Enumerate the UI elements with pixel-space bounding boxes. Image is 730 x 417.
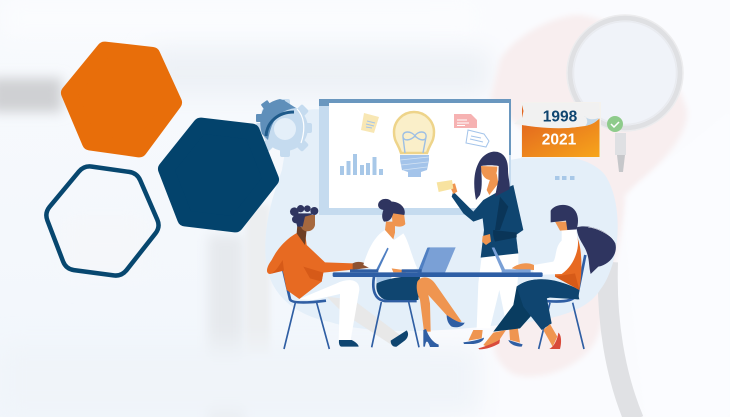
blazer: [452, 185, 523, 258]
stethoscope chest piece: [567, 15, 683, 172]
vest: [555, 236, 581, 290]
hexagon: orange: [69, 50, 174, 149]
icon: light bulb: [394, 112, 434, 177]
hand: card arm: [449, 183, 457, 194]
card: [437, 180, 453, 192]
person: seated woman in orange vest: [478, 205, 616, 349]
blouse: [363, 230, 417, 282]
table: [333, 272, 543, 277]
sticky note: yellow: [361, 113, 379, 133]
skirt: [376, 276, 420, 300]
coat sleeve: [625, 110, 730, 417]
stethoscope and hand photo: [490, 15, 730, 417]
hand: [490, 15, 687, 377]
shoes: [339, 340, 359, 347]
whiteboard: [319, 99, 511, 215]
shirt and arm: [533, 229, 578, 275]
meeting team illustration: [267, 152, 616, 349]
face: [481, 166, 497, 180]
stethoscope tube: [608, 262, 634, 417]
feet: [468, 330, 483, 341]
leg front: [517, 279, 579, 330]
hand: [512, 263, 534, 270]
light blue blob: [265, 109, 618, 331]
heels: [447, 315, 465, 327]
ponytail: [577, 226, 616, 274]
icon: gear: [256, 99, 312, 157]
three dots: [555, 176, 574, 180]
laptop: left: [350, 248, 389, 272]
neck and head: [385, 222, 395, 239]
trousers: [477, 247, 518, 328]
hair: [378, 199, 405, 222]
legs: [417, 277, 462, 332]
laptop: middle: [402, 247, 456, 273]
person: standing woman: [437, 152, 523, 347]
face: [555, 222, 568, 231]
bar chart: [340, 154, 383, 175]
hand: [353, 262, 371, 269]
back leg: [327, 297, 400, 345]
feet: [483, 330, 506, 347]
person: seated woman in white: [363, 199, 465, 347]
hair: [290, 205, 318, 227]
sticky note: blue: [466, 130, 489, 147]
person: seated man in orange: [267, 205, 408, 349]
icon: check badge: [607, 116, 623, 132]
leg back: [493, 279, 579, 332]
hexagon: navy: [166, 126, 271, 224]
chair: [372, 277, 419, 347]
hexagon: outline: [46, 166, 159, 276]
hand: [392, 268, 406, 272]
laptop: right: [492, 247, 531, 272]
chair: [539, 255, 585, 349]
year label: 1998: 1998: [543, 108, 578, 126]
hair: [551, 205, 578, 230]
chair: [281, 262, 329, 349]
sweater: [267, 231, 355, 299]
sticky note: pink: [454, 114, 477, 128]
hair: [474, 152, 510, 200]
neck: [487, 173, 498, 195]
year label: 2021: 2021: [542, 132, 577, 148]
neck and head: [297, 225, 307, 245]
hand: hip: [482, 234, 491, 245]
date tag: [514, 102, 601, 158]
trousers: [298, 280, 359, 340]
